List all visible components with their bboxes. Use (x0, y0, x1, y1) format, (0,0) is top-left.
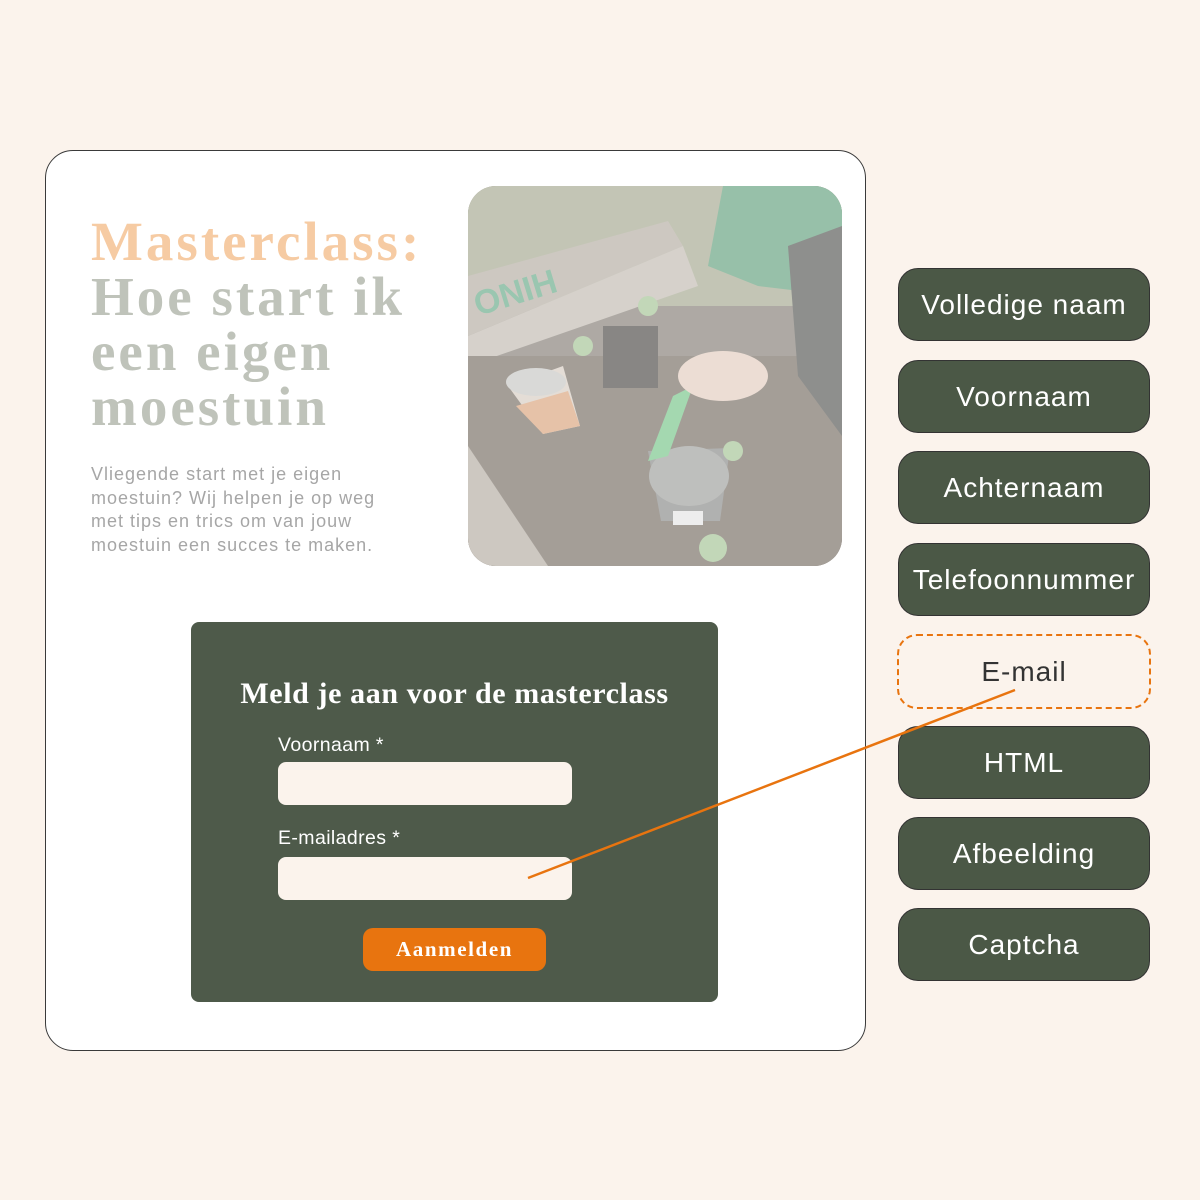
form heading: Meld je aan voor de masterclass (240, 677, 669, 710)
label: voornaam: Voornaam * (278, 734, 384, 756)
panel: signup form (191, 622, 718, 1002)
field button: captcha (898, 908, 1150, 981)
field button: achternaam: Achternaam (944, 472, 1104, 503)
intro text: Vliegende start met je eigen moestuin? Wij helpen je op weg met tips en trics om van jouw moestuin een succes te maken. (91, 464, 375, 554)
title: Masterclass: (91, 211, 422, 272)
field button: volledige naam (898, 268, 1150, 341)
title: een eigen (91, 321, 333, 382)
field button: html: HTML (984, 747, 1064, 778)
input: voornaam (278, 762, 572, 805)
button: aanmelden: Aanmelden (396, 937, 513, 961)
field button: volledige naam: Volledige naam (921, 289, 1127, 320)
field button: e-mail (dashed): E-mail (981, 656, 1067, 687)
field button: voornaam: Voornaam (956, 381, 1092, 412)
field button: telefoonnummer: Telefoonnummer (913, 564, 1135, 595)
main card (45, 150, 866, 1051)
field button: captcha: Captcha (968, 929, 1080, 960)
title (91, 211, 422, 437)
field button: e-mail (dashed) (897, 634, 1151, 709)
title: moestuin (91, 376, 329, 437)
input: e-mail (278, 857, 572, 900)
button: aanmelden (363, 928, 546, 971)
field button: html (898, 726, 1150, 799)
title: Hoe start ik (91, 266, 405, 327)
photo: garden: ONIH (469, 262, 562, 324)
field button: voornaam (898, 360, 1150, 433)
field button: afbeelding (898, 817, 1150, 890)
field button: achternaam (898, 451, 1150, 524)
field button: afbeelding: Afbeelding (953, 838, 1095, 869)
label: e-mailadres: E-mailadres * (278, 827, 400, 849)
field button: telefoonnummer (898, 543, 1150, 616)
photo: garden (468, 186, 842, 566)
